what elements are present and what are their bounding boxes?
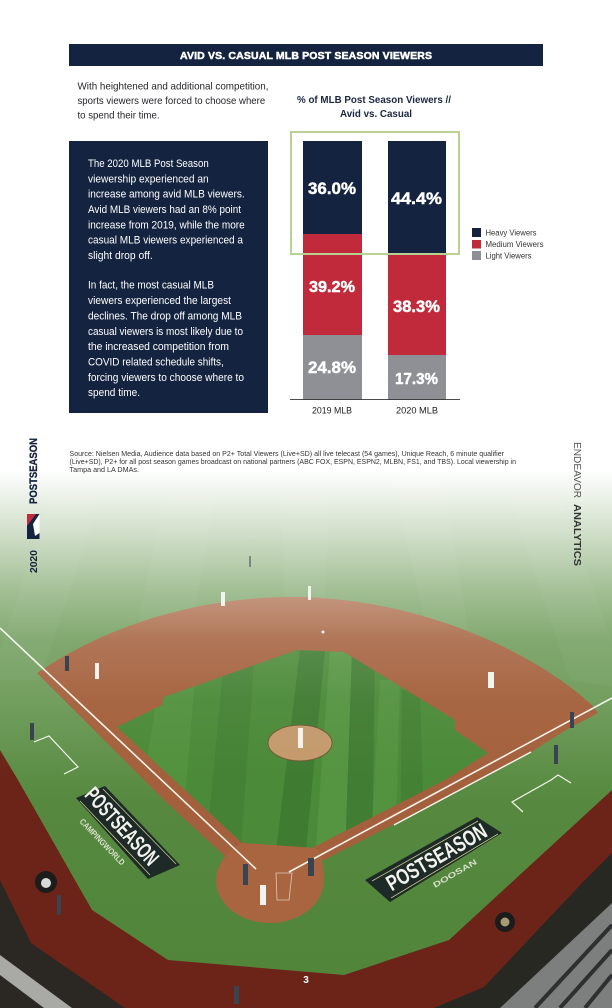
side label: endeavor analytics: ANALYTICS <box>571 504 582 566</box>
axis line <box>290 398 460 400</box>
source note: (Live+SD), P2+ for all post season games broadcast on national partners (ABC FOX, ESPN, ESPN2, MLBN, FS1, and TBS). Local viewership in <box>70 457 516 466</box>
side label: 2020 postseason with MLB logo: POSTSEASON <box>28 438 40 504</box>
sponsor text: camping world: CAMPINGWORLD <box>78 816 127 867</box>
legend: Light Viewers <box>486 252 532 260</box>
stacked bar chart <box>290 141 460 416</box>
panel: narrative text: Avid MLB viewers had an 8% point <box>88 204 241 216</box>
source note: Source: Nielsen Media, Audience data based on P2+ Total Viewers (Live+SD) all live telecast (54 games), Unique Reach, 6 minute qualifier <box>70 449 505 458</box>
infield grass diamond <box>117 650 488 848</box>
bar: 2020 MLB <box>388 141 446 400</box>
side label: endeavor analytics: ENDEAVOR <box>571 442 582 498</box>
pitcher's mound <box>268 725 332 761</box>
sponsor text: doosan: DOOSAN <box>432 857 479 890</box>
icon: MLB logo <box>27 514 40 539</box>
left postseason badge <box>76 782 180 879</box>
side label: 2020 postseason with MLB logo: 2020 <box>28 550 40 573</box>
axis label 2020: 2020 MLB <box>396 406 438 416</box>
side label: 2020 postseason with MLB logo <box>27 438 40 573</box>
on-field round logos <box>35 871 515 932</box>
bar: 2019 MLB: 24.8% <box>308 359 356 377</box>
infield dirt arc and basepaths <box>37 597 598 860</box>
outfield mowing stripes <box>0 470 612 690</box>
title banner <box>69 44 543 66</box>
right postseason badge: POSTSEASON <box>382 818 491 896</box>
highlight box <box>291 132 459 254</box>
side label: endeavor analytics <box>571 442 582 566</box>
panel: narrative text: increase from 2019, while the more <box>88 219 245 231</box>
left postseason badge: POSTSEASON <box>80 782 164 870</box>
intro text: to spend their time. <box>78 110 160 122</box>
panel: narrative text <box>69 141 268 413</box>
panel: narrative text: viewers experienced the largest <box>88 295 231 307</box>
panel: narrative text: casual viewers is most likely due to <box>88 326 243 338</box>
page number: 3 <box>303 975 309 986</box>
warning track <box>0 750 612 1008</box>
panel: narrative text: forcing viewers to choose where to <box>88 372 244 384</box>
bar: 2020 MLB: 38.3% <box>393 298 440 316</box>
panel: narrative text: declines. The drop off among MLB <box>88 310 242 322</box>
chart title: % of MLB Post Season Viewers // <box>297 94 451 106</box>
players <box>30 556 574 1004</box>
chart title: Avid vs. Casual <box>340 108 412 120</box>
infield mowing stripes <box>210 650 423 848</box>
stands bottom left <box>0 880 125 1008</box>
panel: narrative text: increase among avid MLB viewers. <box>88 189 245 201</box>
panel: narrative text: The 2020 MLB Post Season <box>88 158 209 170</box>
home plate dirt circle <box>216 843 324 923</box>
photo: baseball field from above <box>0 470 612 1008</box>
panel: narrative text: viewership experienced an <box>88 173 209 185</box>
foul lines <box>0 628 612 900</box>
legend <box>472 228 544 260</box>
axis label 2019: 2019 MLB <box>312 406 352 416</box>
intro text <box>78 80 268 122</box>
panel: narrative text: slight drop off. <box>88 250 153 262</box>
source note <box>70 449 516 474</box>
panel: narrative text: spend time. <box>88 387 140 399</box>
panel: narrative text: COVID related schedule shifts, <box>88 356 224 368</box>
stands bottom right <box>434 853 612 1008</box>
legend: Heavy Viewers <box>486 228 536 238</box>
outfield grass <box>0 470 612 1008</box>
right postseason badge <box>365 817 502 902</box>
panel: narrative text: casual MLB viewers experienced a <box>88 235 243 247</box>
bar: 2019 MLB: 39.2% <box>309 279 355 296</box>
bar: 2020 MLB: 17.3% <box>395 371 438 388</box>
source note: Tampa and LA DMAs. <box>70 465 139 474</box>
intro text: sports viewers were forced to choose where <box>78 95 265 107</box>
intro text: With heightened and additional competition, <box>78 80 268 92</box>
panel: narrative text: the increased competition from <box>88 341 229 353</box>
chart title <box>297 94 451 120</box>
bar: 2019 MLB: 36.0% <box>308 180 356 198</box>
legend: Medium Viewers <box>486 240 544 249</box>
bar: 2020 MLB: 44.4% <box>391 189 442 208</box>
title banner: AVID VS. CASUAL MLB POST SEASON VIEWERS <box>180 50 432 62</box>
fog overlay <box>0 470 612 780</box>
panel: narrative text: In fact, the most casual MLB <box>88 280 214 292</box>
bar: 2019 MLB <box>303 141 362 400</box>
